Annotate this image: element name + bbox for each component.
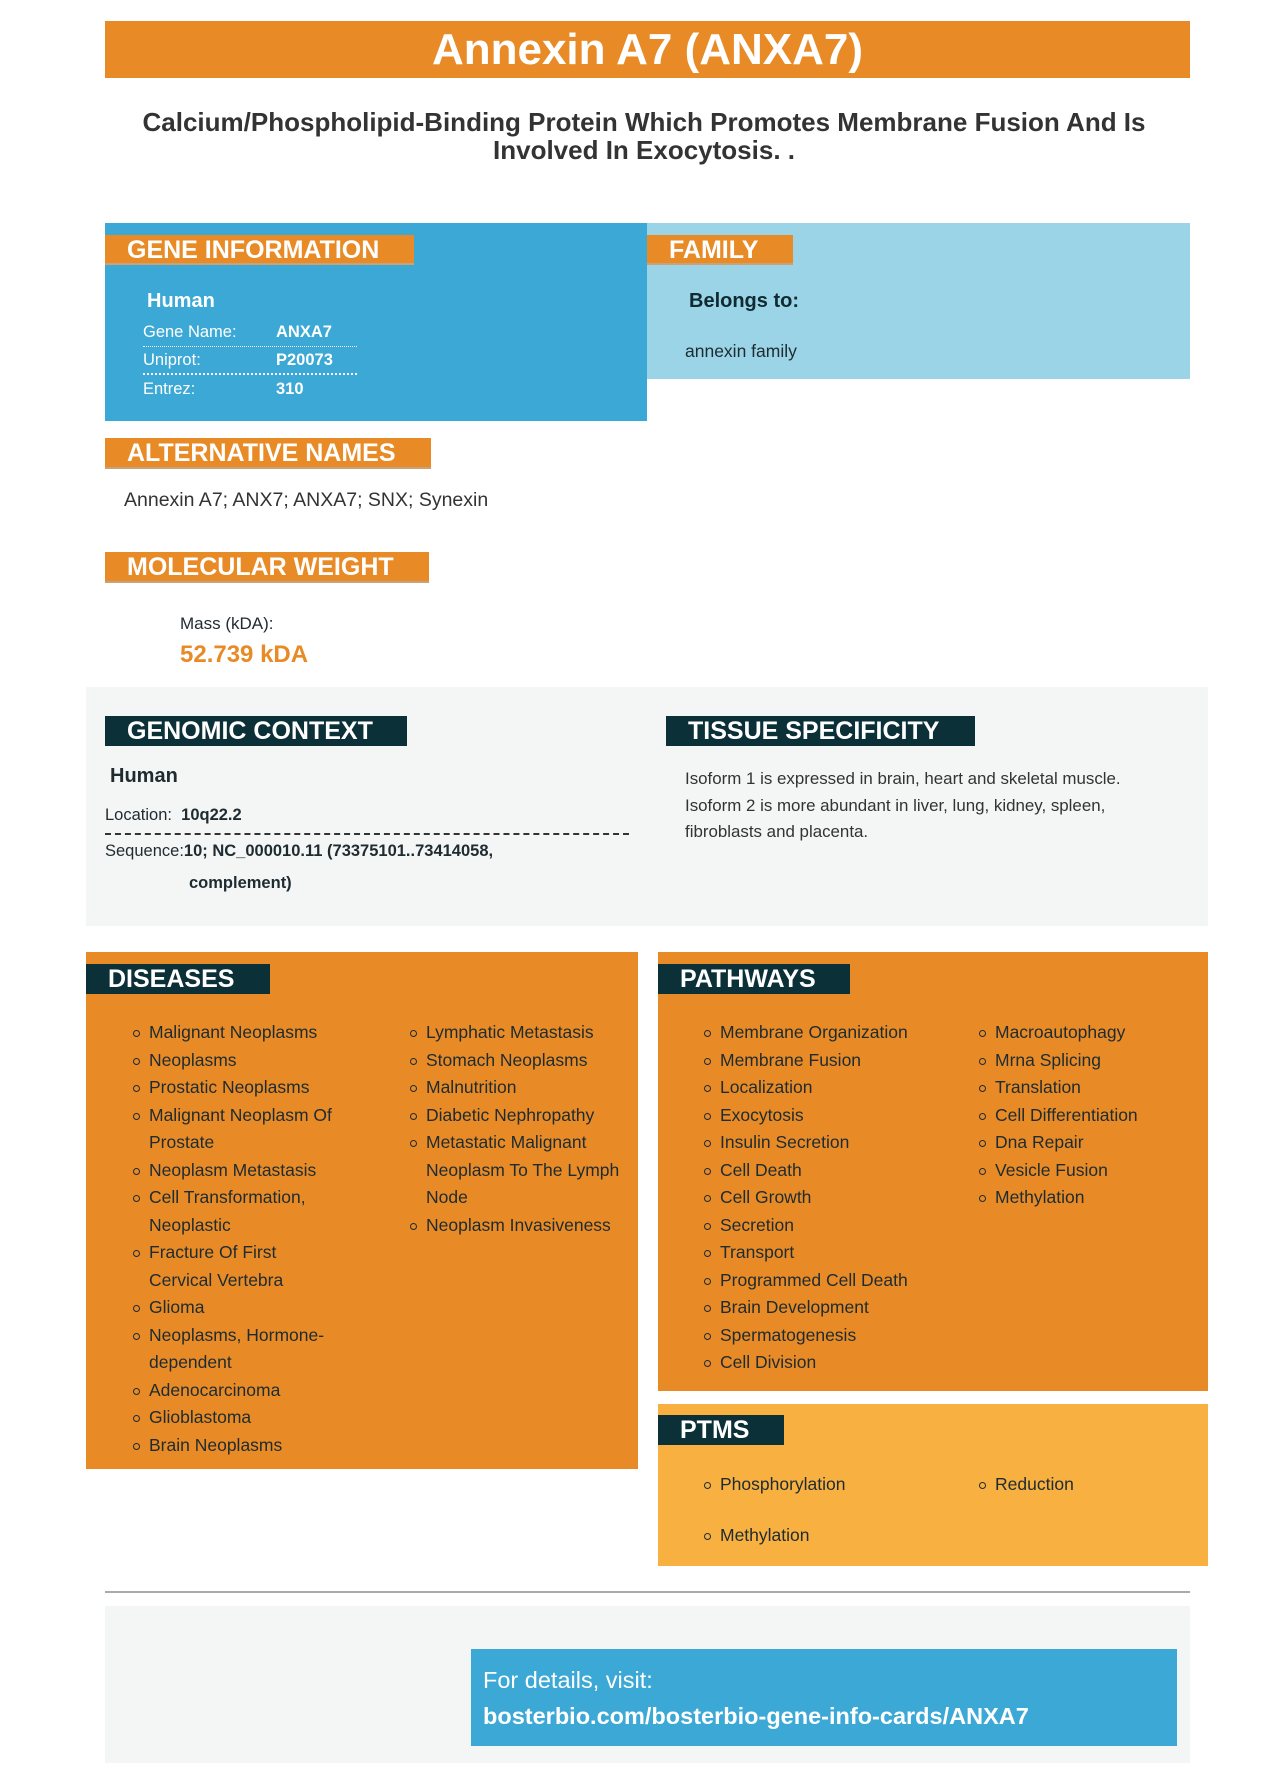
panel: family [647, 223, 1190, 379]
title bar: Annexin A7 (ANXA7) [432, 25, 863, 74]
list: pathways column 2: Cell Differentiation [995, 1104, 1138, 1124]
list: pathways column 1: Secretion [720, 1214, 794, 1234]
heading: pathways [658, 964, 850, 994]
text: sequence [105, 842, 493, 892]
list: pathways column 1: Exocytosis [720, 1104, 804, 1124]
list: diseases column 2 [410, 1022, 619, 1234]
list: pathways column 2: Dna Repair [995, 1132, 1084, 1152]
list: diseases column 2: Neoplasm Invasiveness [426, 1214, 611, 1234]
callout: details link: For details, visit: [483, 1667, 653, 1693]
gene info table [143, 323, 357, 398]
list: diseases column 1: Fracture Of First Cervical Vertebra [149, 1242, 283, 1290]
heading: tissue specificity: TISSUE SPECIFICITY [688, 717, 939, 745]
list: pathways column 2: Mrna Splicing [995, 1050, 1101, 1070]
text: species: Human [147, 290, 215, 312]
list: diseases column 2: Lymphatic Metastasis [426, 1022, 594, 1042]
text: location: Location: 10q22.2 [105, 806, 242, 824]
list: diseases column 1: Glioblastoma [149, 1407, 251, 1427]
list: diseases column 1: Glioma [149, 1297, 204, 1317]
text: family name: annexin family [685, 341, 797, 361]
subtitle: Calcium/Phospholipid-Binding Protein Which Promotes Membrane Fusion And Is Involved In Exocytosis. . [143, 107, 1145, 165]
list: pathways column 1: Brain Development [720, 1297, 869, 1317]
panel: ptms [658, 1404, 1208, 1566]
list: pathways column 1: Cell Death [720, 1160, 802, 1180]
list: pathways column 1: Transport [720, 1242, 794, 1262]
list: ptms column 1: Phosphorylation [720, 1474, 846, 1494]
list: diseases column 1: Adenocarcinoma [149, 1380, 280, 1400]
heading: family: FAMILY [669, 236, 758, 264]
title bar [105, 21, 1190, 78]
list: pathways column 2: Macroautophagy [995, 1022, 1125, 1042]
list: pathways column 1: Insulin Secretion [720, 1132, 849, 1152]
gene info table: P20073 [276, 351, 333, 369]
text: alternative names: Annexin A7; ANX7; ANXA7; SNX; Synexin [124, 489, 488, 511]
list: diseases column 1: Neoplasms [149, 1050, 237, 1070]
gene info table: 310 [276, 380, 304, 398]
text: human: Human [110, 765, 178, 787]
heading: pathways: PATHWAYS [680, 965, 816, 993]
text: sequence: complement) [189, 874, 292, 892]
list: ptms column 1: Methylation [720, 1525, 810, 1545]
heading: diseases [86, 964, 270, 994]
list: diseases column 2: Stomach Neoplasms [426, 1050, 587, 1070]
heading: alternative names: ALTERNATIVE NAMES [127, 439, 396, 467]
list: diseases column 2: Metastatic Malignant Neoplasm To The Lymph Node [426, 1132, 619, 1207]
list: diseases column 1: Malignant Neoplasms [149, 1022, 317, 1042]
heading: genomic context: GENOMIC CONTEXT [127, 717, 373, 745]
list: diseases column 2: Malnutrition [426, 1077, 516, 1097]
list: pathways column 1: Spermatogenesis [720, 1324, 856, 1344]
heading: family [647, 235, 793, 265]
list: pathways column 2 [979, 1022, 1138, 1207]
list: pathways column 1: Localization [720, 1077, 812, 1097]
panel: pathways [658, 952, 1208, 1391]
list: ptms column 1 [704, 1474, 846, 1545]
list: pathways column 1: Membrane Fusion [720, 1050, 861, 1070]
gene info table: ANXA7 [276, 323, 332, 341]
heading: ptms [658, 1415, 784, 1445]
heading: ptms: PTMS [680, 1416, 749, 1444]
text: tissue specificity: Isoform 1 is expressed in brain, heart and skeletal muscle. Isoform 2 is more abundant in liver, lung, kidney, spleen, fibroblasts and placenta. [685, 769, 1121, 841]
list: pathways column 2: Translation [995, 1077, 1081, 1097]
list: pathways column 1: Membrane Organization [720, 1022, 908, 1042]
callout: details link: bosterbio.com/bosterbio-gene-info-cards/ANXA7 [483, 1703, 1029, 1729]
list: diseases column 1: Prostatic Neoplasms [149, 1077, 309, 1097]
heading: diseases: DISEASES [108, 965, 234, 993]
list: diseases column 1: Brain Neoplasms [149, 1434, 282, 1454]
heading: molecular weight: MOLECULAR WEIGHT [127, 553, 394, 581]
panel: gene information [105, 223, 647, 421]
gene info table: Uniprot: [143, 351, 201, 369]
footer [105, 1606, 1190, 1763]
gene info table: Gene Name: [143, 323, 237, 341]
text: mass label: Mass (kDA): [180, 614, 274, 633]
list: diseases column 1 [133, 1022, 332, 1454]
panel: genomic context and tissue [86, 687, 1208, 926]
text: sequence: Sequence:10; NC_000010.11 (73375101..73414058, [105, 842, 493, 860]
list: diseases column 1: Malignant Neoplasm Of Prostate [149, 1104, 332, 1152]
list: diseases column 1: Neoplasms, Hormone-dependent [149, 1324, 324, 1372]
text: mass value: 52.739 kDA [180, 641, 308, 668]
list: ptms column 2: Reduction [995, 1474, 1074, 1494]
list: diseases column 1: Neoplasm Metastasis [149, 1160, 316, 1180]
list: pathways column 2: Methylation [995, 1187, 1084, 1207]
list: diseases column 2: Diabetic Nephropathy [426, 1104, 594, 1124]
gene info table: Entrez: [143, 380, 195, 398]
text: belongs to: Belongs to: [689, 290, 799, 312]
list: pathways column 1: Cell Growth [720, 1187, 811, 1207]
list: pathways column 1 [704, 1022, 908, 1372]
list: diseases column 1: Cell Transformation, Neoplastic [149, 1187, 306, 1234]
callout: details link [471, 1649, 1177, 1746]
list: pathways column 2: Vesicle Fusion [995, 1160, 1108, 1180]
list: pathways column 1: Cell Division [720, 1352, 816, 1372]
panel: diseases [86, 952, 638, 1469]
heading: gene information: GENE INFORMATION [127, 236, 379, 264]
list: pathways column 1: Programmed Cell Death [720, 1270, 908, 1290]
